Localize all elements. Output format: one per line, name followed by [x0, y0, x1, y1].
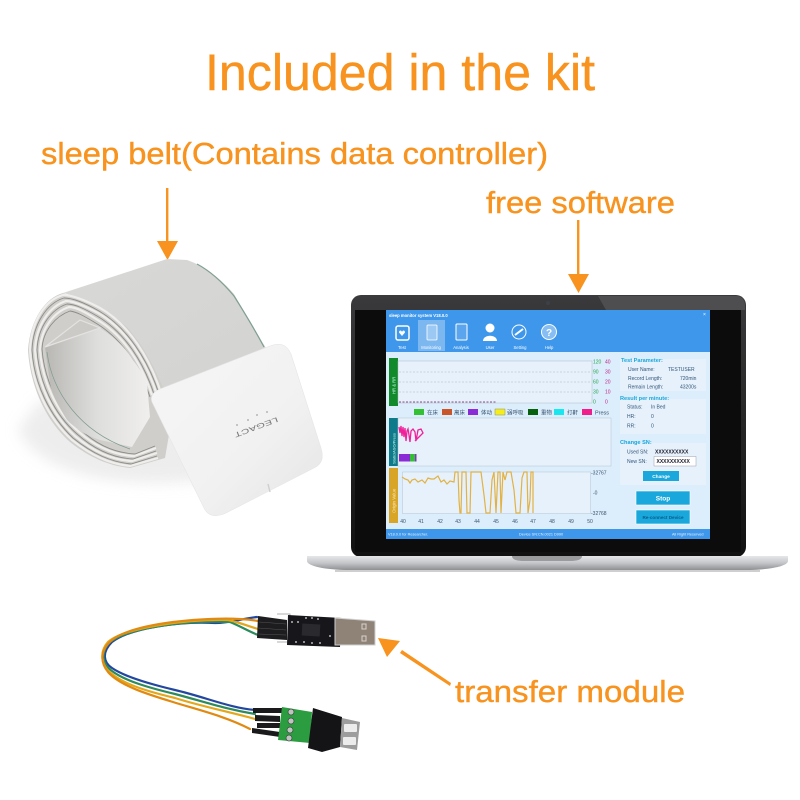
board pads: [291, 617, 331, 644]
usb male plug: [335, 618, 375, 645]
window header bar: [386, 310, 710, 352]
usb female socket: [340, 718, 360, 750]
panel: result per minute: In Bed: [651, 404, 666, 410]
button: stop: Stop: [656, 496, 670, 502]
chart: origin value: 45: [493, 519, 499, 525]
chart: status and press: [389, 418, 611, 466]
toolbar tabs: Help: [545, 345, 554, 350]
laptop screen black border: [355, 310, 741, 552]
toolbar tabs: Test: [398, 345, 407, 350]
panel: result per minute: [620, 396, 706, 434]
chart: HR and RR: 30: [605, 370, 611, 376]
toolbar tabs: ?: [546, 328, 552, 339]
panel: test parameter: Remain Length:: [628, 384, 663, 390]
wires: [102, 617, 258, 729]
close button: ×: [703, 312, 706, 318]
label: transfer module: transfer module: [455, 674, 685, 709]
laptop base: [307, 556, 788, 570]
belt inner surface: [45, 328, 150, 447]
chart: HR and RR: HR & RR: [392, 377, 396, 394]
belt outer surface: [63, 259, 266, 392]
label: free software: free software: [486, 185, 675, 220]
lower dupont connectors: [252, 708, 282, 737]
chart: origin value: 47: [530, 519, 536, 525]
data controller box: [151, 344, 322, 516]
panel: test parameter: [620, 358, 706, 391]
label: sleep belt: sleep belt(Contains data controller): [41, 136, 548, 171]
legend: 重物: [541, 408, 553, 416]
chart: HR and RR: 0: [593, 400, 596, 406]
chart: origin value: Origin Value: [392, 488, 396, 513]
chart: origin value: 42: [437, 519, 443, 525]
software window: [386, 310, 710, 539]
toolbar tabs: Setting: [513, 345, 527, 350]
tab highlight: monitoring: [418, 320, 445, 351]
panel: change SN: [620, 440, 706, 485]
chart: origin value: 46: [512, 519, 518, 525]
chart: HR and RR: 30: [593, 390, 599, 396]
panel: change SN: Change: [652, 474, 670, 480]
green terminal block: [278, 707, 312, 743]
legend: Press: [595, 410, 609, 416]
window background: [386, 310, 710, 539]
chart: origin value: 50: [587, 519, 593, 525]
board chip: [302, 624, 320, 636]
upper dupont connector: [257, 616, 287, 640]
toolbar tabs: [396, 324, 556, 350]
legend: 在床: [427, 408, 439, 416]
usb plug holes: [362, 624, 366, 641]
panel: test parameter: 720min: [680, 376, 697, 382]
button: re-connect device: Re-connect Device: [642, 515, 684, 520]
title: Included in the kit: [205, 44, 595, 101]
panel: change SN: Change SN:: [620, 440, 652, 446]
chart: origin value: 44: [474, 519, 480, 525]
arrow: to sleep belt: [157, 188, 178, 260]
panel: result per minute: HR:: [627, 414, 636, 420]
box seam: [268, 484, 270, 492]
wound layer gaps: [32, 298, 158, 464]
sleep belt with data controller: [18, 259, 322, 516]
panel: result per minute: 0: [651, 424, 654, 430]
laptop camera: [546, 301, 550, 305]
chart: HR and RR: 60: [593, 380, 599, 386]
window title: sleep monitor system V18.0.0: [389, 313, 448, 318]
window footer bar: V18.0.0 for Researcher.: [388, 532, 428, 536]
panel: result per minute: Status:: [627, 404, 643, 410]
legend: 打鼾: [567, 408, 579, 416]
chart: origin value: -32767: [591, 470, 607, 476]
legend: [414, 408, 609, 416]
transfer module: [102, 614, 375, 752]
panel: result per minute: Result per minute:: [620, 396, 669, 402]
panel: change SN: Used SN:: [627, 450, 648, 456]
chart: origin value: -0: [593, 490, 598, 496]
inner belt flap: [45, 320, 100, 347]
laptop lid: [351, 295, 746, 557]
base shadow: [335, 570, 760, 572]
legend: 离床: [454, 408, 466, 416]
arrow: to free software: [568, 220, 589, 293]
panel: result per minute: RR:: [627, 424, 636, 430]
button: re-connect device: [636, 510, 690, 524]
usb adapter board: [287, 615, 342, 647]
window footer bar: All Right Reserved: [672, 532, 703, 536]
chart: HR and RR: 20: [605, 380, 611, 386]
button: stop: [636, 491, 690, 505]
toolbar tabs: Monitoring: [421, 345, 441, 350]
laptop notch: [512, 556, 582, 561]
toolbar tabs: Analysis: [453, 345, 469, 350]
chart: origin value: 43: [455, 519, 461, 525]
chart: HR and RR: 40: [605, 360, 611, 366]
panel: test parameter: TESTUSER: [668, 367, 695, 373]
panel: result per minute: 0: [651, 414, 654, 420]
upper connector slots: [258, 622, 286, 635]
rolled belt base: [28, 293, 175, 468]
chart: origin value: 40: [400, 519, 406, 525]
chart: origin value: 48: [549, 519, 555, 525]
legend: 体动: [481, 408, 493, 416]
arrow: to transfer module: [378, 638, 451, 686]
panel: test parameter: Record Length:: [628, 376, 662, 382]
panel: test parameter: 43200s: [680, 384, 697, 390]
chart: HR and RR: 0: [605, 400, 608, 406]
chart: origin value: 41: [418, 519, 424, 525]
chart: origin value: -32768: [591, 511, 607, 517]
chart: origin value: [389, 468, 607, 525]
panel: change SN: New SN:: [627, 459, 647, 465]
laptop lid glare: [598, 296, 745, 310]
chart: status and press: Static/ASO/Press: [392, 433, 396, 464]
panel: test parameter: User Name:: [628, 367, 655, 373]
inner green seam: [47, 352, 130, 449]
panel: test parameter: Test Parameter:: [621, 358, 663, 364]
toolbar tabs: User: [486, 345, 495, 350]
panel: change SN: XXXXXXXXXX: [655, 450, 689, 456]
window footer bar: [386, 529, 710, 539]
belt shadow: [18, 400, 210, 483]
box logo: LEGACT: [232, 415, 279, 438]
panel: change SN: XXXXXXXXXX: [656, 459, 691, 465]
chart: HR and RR: [389, 358, 611, 406]
chart: HR and RR: 10: [605, 390, 611, 396]
wound layer strips: [30, 295, 160, 466]
chart: origin value: 49: [568, 519, 574, 525]
usb socket openings: [343, 724, 357, 745]
belt green edge: [197, 264, 264, 347]
chart: HR and RR: 90: [593, 370, 599, 376]
terminal screws: [286, 709, 294, 741]
upper pin header: [277, 614, 290, 642]
usb female housing: [308, 708, 342, 752]
box indicator marks: [236, 411, 268, 426]
laptop: [307, 295, 788, 572]
window footer bar: Device SN:CN.0021 D990: [519, 532, 563, 536]
legend: 弱呼吸: [507, 410, 524, 416]
chart: HR and RR: 120: [593, 360, 602, 366]
